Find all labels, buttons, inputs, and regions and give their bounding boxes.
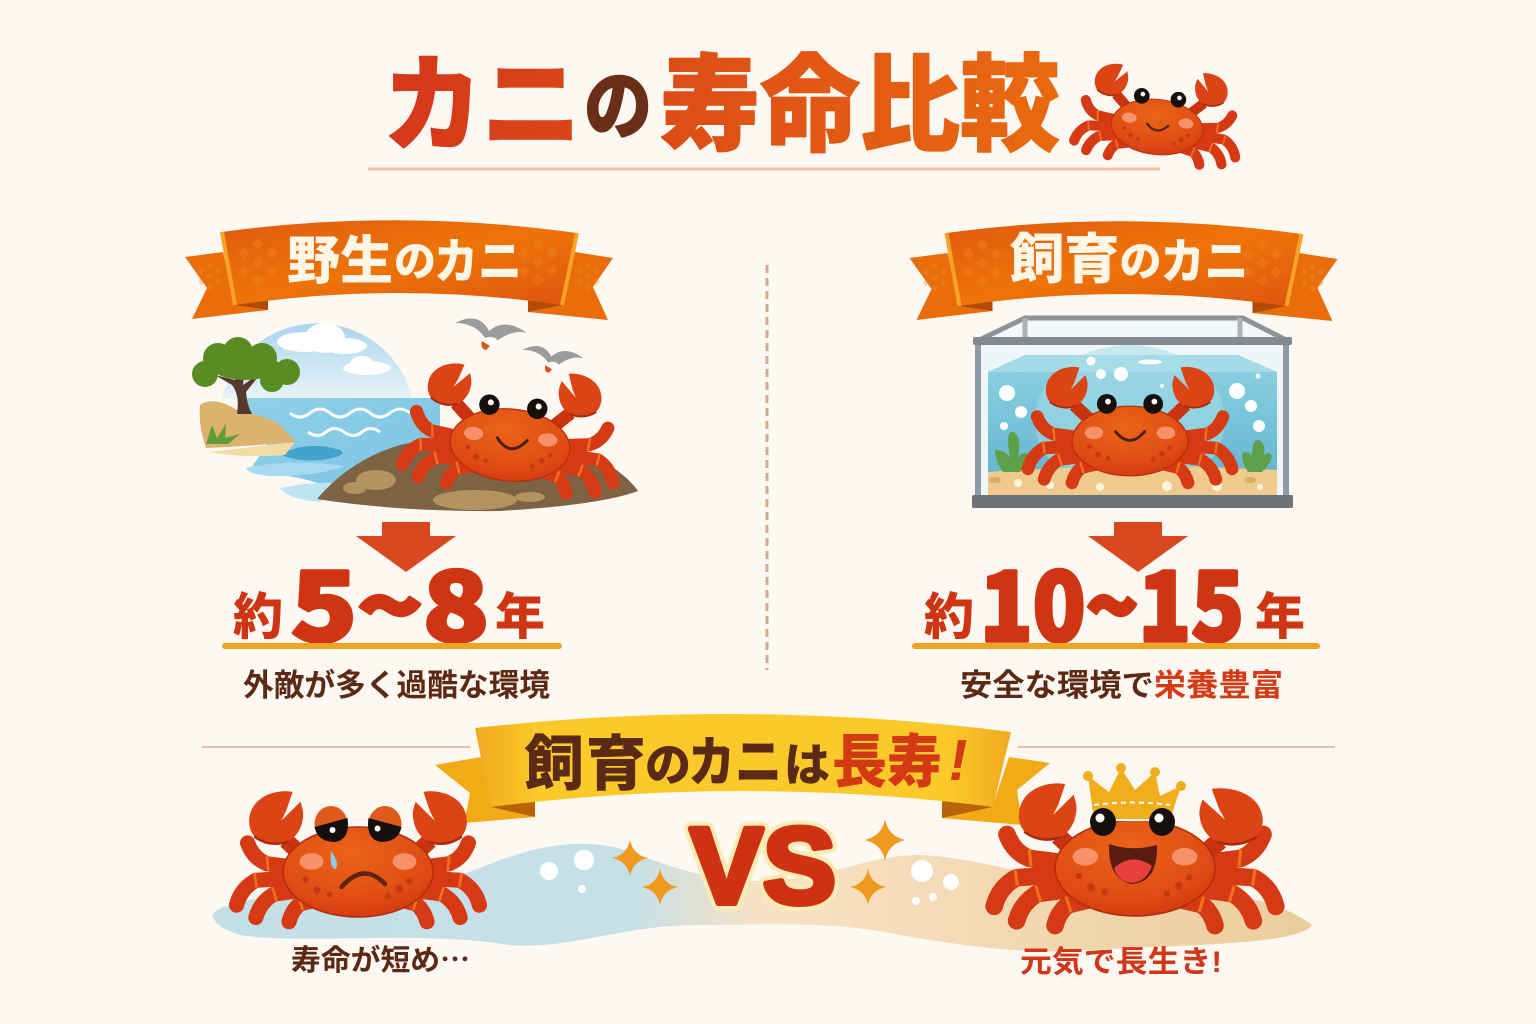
arrow	[1088, 522, 1188, 572]
lifespan: wild: 年	[495, 589, 545, 645]
caption: wild: 外敵が多く過酷な環境	[243, 668, 550, 703]
panel: wild crab	[185, 220, 638, 703]
title: カニ	[383, 48, 581, 165]
VS mark: VS	[690, 805, 836, 926]
banner: conclusion: 長寿	[832, 730, 942, 795]
banner: conclusion: 飼育	[524, 731, 646, 798]
title: の	[584, 65, 652, 150]
title: 寿命比較	[660, 48, 1060, 165]
icon: crown	[1083, 763, 1186, 820]
crab on rock	[401, 359, 622, 497]
banner: wild crab	[185, 220, 613, 320]
lifespan: captive: 約	[924, 589, 974, 645]
banner: captive crab: 飼育	[1010, 230, 1120, 290]
banner: wild crab: カニ	[434, 236, 522, 289]
banner: conclusion: は	[784, 739, 830, 791]
bottom wave backdrop	[212, 844, 1312, 951]
banner: captive crab: の	[1120, 238, 1162, 285]
banner: conclusion: の	[645, 739, 691, 791]
caption: sad crab: 寿命が短め…	[291, 937, 470, 979]
crab: sad	[237, 791, 479, 979]
crab in aquarium	[1028, 367, 1232, 483]
crab: happy with crown	[994, 763, 1276, 979]
illustration: seashore scene	[192, 318, 638, 511]
arrow	[356, 522, 456, 572]
lifespan: wild: 5~8	[291, 533, 489, 669]
VS mark: VS	[690, 805, 836, 926]
icon: title crab	[1073, 60, 1244, 168]
banner: conclusion	[435, 714, 1050, 825]
lifespan: captive: 10~15	[980, 533, 1244, 669]
caption: captive: 安全な環境で 栄養豊富	[960, 668, 1283, 703]
lifespan: captive: 年	[1255, 589, 1305, 645]
illustration: aquarium	[972, 318, 1293, 508]
lifespan: wild: 約	[233, 589, 283, 645]
title	[383, 48, 1060, 165]
lifespan: wild	[233, 533, 545, 669]
banner: wild crab: 野生	[287, 233, 393, 291]
caption: happy crab: 元気で長生き!	[1020, 946, 1222, 979]
banner: conclusion: !	[943, 728, 974, 793]
sparkles and bubbles	[540, 819, 959, 905]
panel: captive crab	[910, 221, 1338, 703]
banner: conclusion: カニ	[688, 733, 782, 793]
banner: captive crab	[910, 221, 1338, 321]
banner: captive crab: カニ	[1160, 236, 1248, 289]
banner: wild crab: の	[394, 238, 436, 285]
